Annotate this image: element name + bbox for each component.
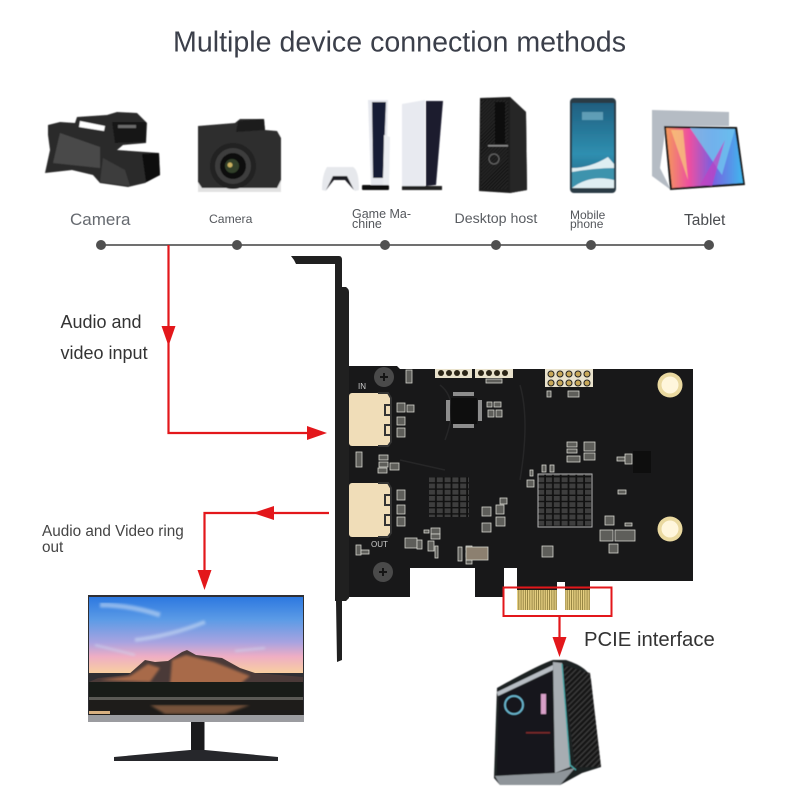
QFP chip — [446, 392, 482, 428]
graphics card — [291, 256, 693, 662]
console white — [402, 100, 443, 190]
label: camera 2: Camera — [209, 212, 253, 226]
PCIE highlight box — [504, 588, 612, 616]
label: desktop host: Desktop host — [454, 211, 537, 227]
arrow: PCIE down — [552, 616, 566, 657]
icon: game console and controller — [322, 100, 443, 191]
label: tablet: Tablet — [684, 212, 726, 229]
pin headers — [435, 369, 593, 387]
text: PCIE interface: PCIE interface — [584, 629, 715, 651]
icon: desktop tower — [479, 97, 527, 193]
gold fingers — [517, 590, 590, 610]
icon: tablet — [652, 110, 745, 190]
timeline — [96, 240, 714, 250]
SMD components — [356, 370, 635, 564]
text: audio and video ring out: Audio and Video ring — [42, 523, 184, 540]
arrow: audio and video input — [162, 245, 327, 440]
heatsink small — [429, 477, 469, 517]
chip dark — [633, 451, 651, 473]
port IN — [349, 382, 391, 446]
screen — [89, 597, 303, 715]
port IN: IN — [358, 382, 366, 391]
icon: broadcast camcorder — [45, 112, 160, 187]
icon: PC tower — [494, 660, 601, 785]
PCB — [349, 366, 693, 610]
port OUT: OUT — [371, 540, 388, 549]
label: camera 1: Camera — [70, 210, 131, 229]
console black — [362, 100, 390, 190]
icon: mirrorless camera — [198, 119, 281, 192]
controller — [322, 167, 359, 191]
screws — [373, 367, 394, 582]
stand — [114, 722, 278, 761]
port OUT — [349, 483, 391, 549]
lens — [210, 143, 256, 189]
heatsink large — [538, 474, 592, 527]
text: audio and video input: Audio and — [60, 312, 142, 332]
label: mobile phone: Mobile — [570, 208, 606, 222]
label: mobile phone: phone — [570, 217, 604, 231]
icon: monitor — [88, 595, 304, 761]
icon: smartphone — [570, 98, 616, 193]
label: game machine: chine — [352, 217, 382, 231]
device labels — [70, 207, 726, 231]
bracket — [291, 256, 349, 662]
title: Multiple device connection methods — [173, 26, 626, 58]
mounting holes — [658, 372, 682, 542]
text: audio and video ring out: out — [42, 539, 64, 556]
label: game machine: Game Ma- — [352, 207, 411, 221]
traces — [400, 385, 525, 480]
arrow: audio and video output — [198, 506, 329, 590]
text: audio and video input: video input — [60, 343, 148, 363]
